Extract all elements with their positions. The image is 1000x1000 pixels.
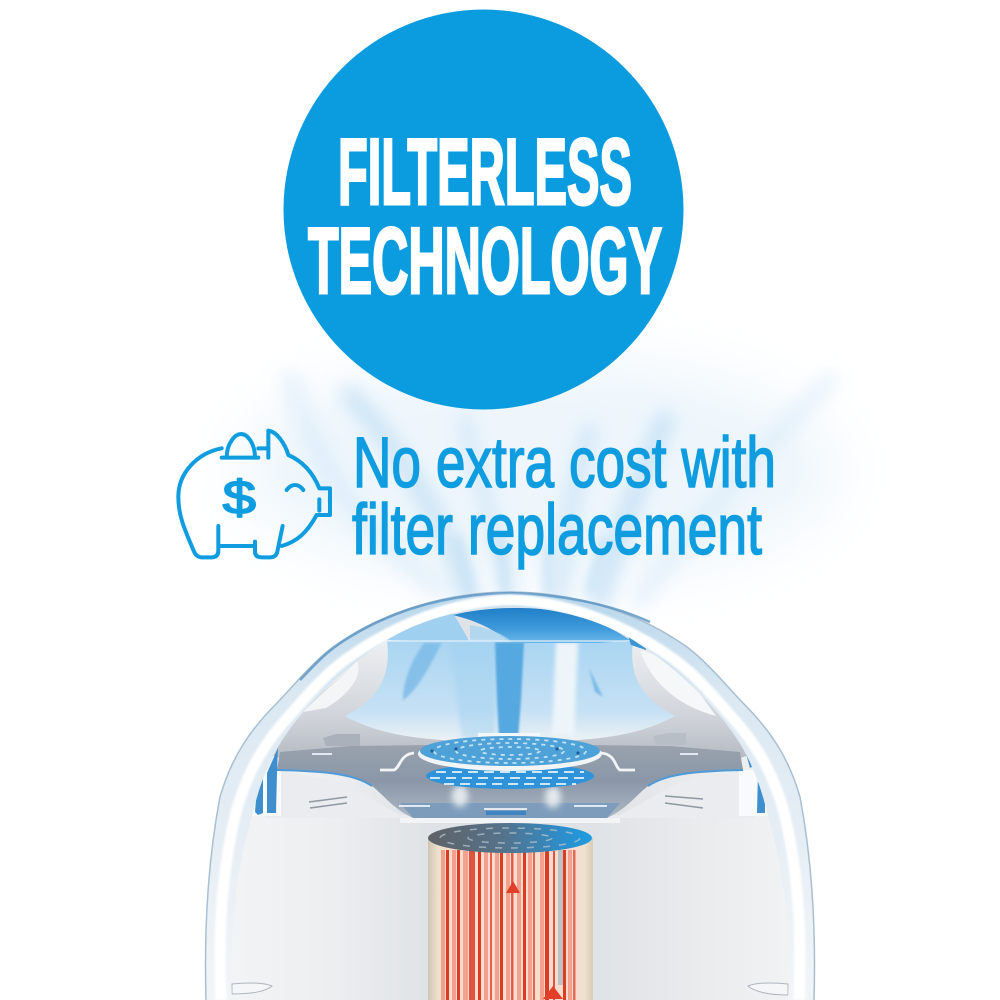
wing right — [640, 650, 716, 716]
red channels — [441, 850, 572, 1000]
central air column — [495, 642, 524, 739]
saturated vapor above dome — [458, 540, 604, 592]
title: Filterless Technology — [308, 119, 662, 313]
pale blue beam left — [454, 656, 496, 738]
interior — [220, 600, 800, 1000]
panel bottom recesses — [232, 983, 788, 995]
metal plate — [277, 744, 743, 818]
vapor streams rising from device — [290, 380, 830, 600]
plate handle right — [601, 753, 635, 770]
interior base — [220, 600, 800, 1000]
plate lower band — [400, 803, 620, 818]
white side gaps — [245, 770, 775, 816]
blue plate edge — [277, 770, 743, 786]
lens bottom line — [387, 640, 627, 642]
text: No extra cost with filter replacement: No extra cost with — [353, 424, 776, 503]
gray channel — [558, 850, 563, 985]
nub right — [653, 733, 686, 742]
gray cone — [273, 638, 747, 758]
title: Filterless Technology: TECHNOLOGY — [308, 208, 662, 313]
plate lower lip — [400, 818, 620, 823]
lens clip — [628, 636, 647, 650]
badge circle — [284, 10, 684, 410]
lower blue ring — [426, 766, 594, 789]
left blue strips — [255, 748, 278, 815]
outer shell — [206, 592, 814, 1000]
text: No extra cost with filter replacement: filter replacement — [352, 491, 762, 570]
airflow chamber — [345, 641, 675, 742]
cylinder cap — [428, 823, 592, 853]
panel slots — [309, 796, 703, 808]
device cutaway — [206, 592, 814, 1000]
fin right — [589, 668, 603, 697]
vapor glow behind text — [240, 355, 840, 585]
pale beam right — [552, 642, 578, 736]
arrow up 2 — [543, 986, 563, 999]
blue lens — [453, 608, 630, 643]
dark blue rim on dome — [300, 593, 650, 680]
arrow up 1 — [506, 881, 520, 893]
plate slits — [312, 754, 698, 809]
shell white highlight band — [220, 600, 800, 1000]
wing left — [303, 661, 359, 712]
icon: piggy bank — [178, 431, 330, 557]
fin left — [403, 643, 442, 700]
filter cylinder — [428, 823, 593, 1000]
underplate shade — [408, 815, 622, 818]
dark center slit — [486, 811, 526, 815]
text: No extra cost with filter replacement — [352, 424, 776, 570]
lens center patch — [470, 625, 512, 642]
perforated disc rim — [418, 750, 602, 771]
right blue strips — [746, 754, 765, 813]
plate handle left — [380, 753, 414, 770]
title: Filterless Technology: FILTERLESS — [338, 119, 632, 224]
dollar sign: $ — [223, 472, 256, 525]
pale column base — [478, 733, 540, 737]
nub left — [323, 734, 360, 746]
shell outline — [206, 592, 814, 1000]
bright spots — [452, 785, 561, 808]
lens light side — [387, 613, 470, 642]
cap pores — [440, 828, 580, 848]
perforated disc — [420, 736, 600, 766]
